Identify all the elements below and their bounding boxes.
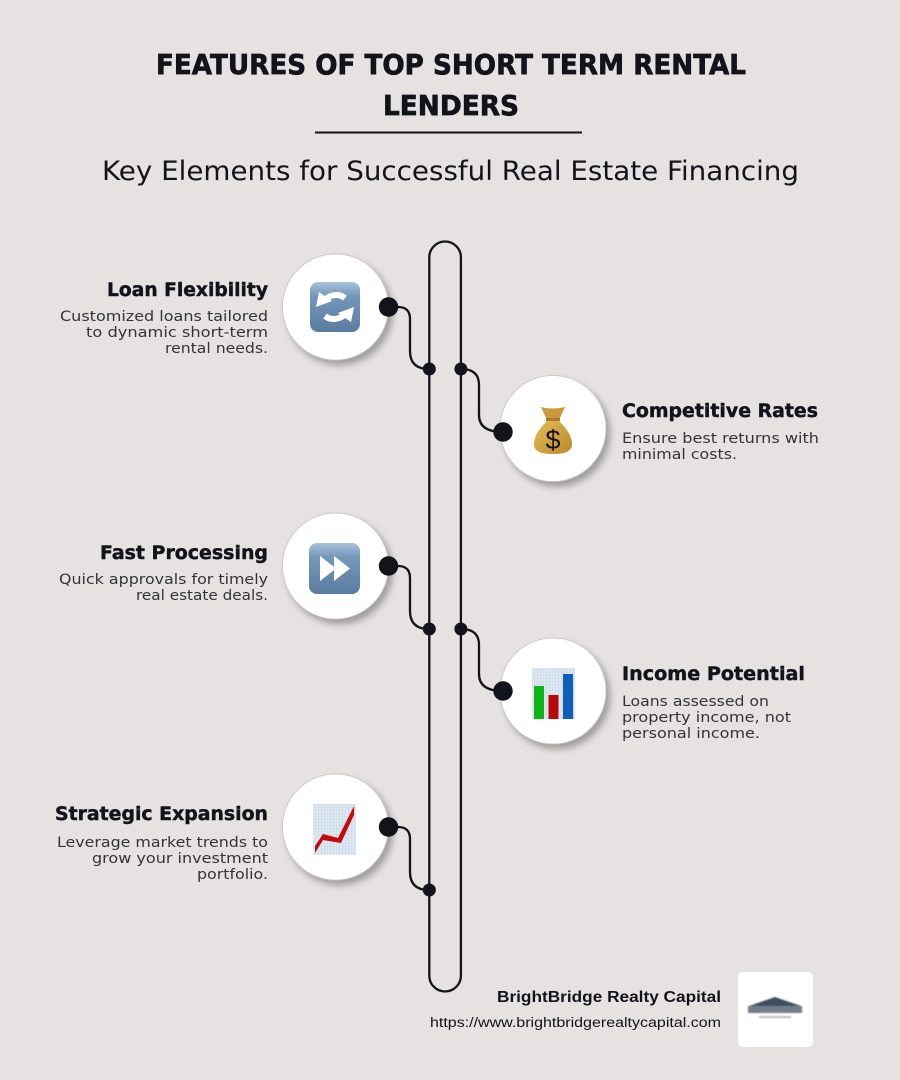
- footer brand: BrightBridge Realty Capital: [497, 989, 721, 1006]
- item: Strategic Expansion: [55, 774, 436, 896]
- icon: arrows cycle: [310, 282, 360, 332]
- fast processing text: Fast Processing: [100, 542, 268, 564]
- connector: [454, 362, 513, 442]
- competitive rates text: [622, 400, 819, 463]
- title: LENDERS: [383, 89, 519, 122]
- loan flexibility text: rental needs.: [165, 341, 268, 357]
- fast processing circle: [282, 513, 388, 619]
- loan flexibility text: Customized loans tailored: [60, 309, 268, 325]
- connector: [379, 297, 436, 376]
- loan flexibility text: [60, 279, 269, 357]
- competitive rates circle: [500, 376, 606, 482]
- subtitle: Key Elements for Successful Real Estate Financing: [102, 156, 799, 187]
- icon: bar chart: [532, 668, 575, 719]
- competitive rates text: Competitive Rates: [622, 400, 818, 422]
- item: Fast Processing: [59, 513, 436, 636]
- strategic expansion text: Strategic Expansion: [55, 803, 268, 825]
- income potential text: personal income.: [622, 726, 760, 742]
- strategic expansion text: Leverage market trends to: [57, 835, 268, 851]
- connector: [454, 622, 513, 701]
- strategic expansion text: portfolio.: [197, 867, 268, 883]
- strategic expansion text: grow your investment: [92, 851, 268, 867]
- competitive rates text: Ensure best returns with: [622, 431, 819, 447]
- title: FEATURES OF TOP SHORT TERM RENTAL: [156, 48, 746, 81]
- income potential text: property income, not: [622, 710, 791, 726]
- icon: rising line chart: [313, 804, 356, 855]
- item: Income Potential: [454, 622, 805, 744]
- loan flexibility text: to dynamic short-term: [86, 325, 268, 341]
- income potential text: [622, 663, 805, 742]
- loan flexibility circle: [282, 254, 388, 360]
- item: Loan Flexibility: [60, 254, 436, 376]
- income potential circle: [500, 638, 606, 744]
- footer brand: https://www.brightbridgerealtycapital.com: [430, 1015, 721, 1030]
- income potential text: Loans assessed on: [622, 694, 769, 710]
- title: [156, 48, 746, 134]
- fast processing text: Quick approvals for timely: [59, 572, 268, 588]
- strategic expansion circle: [282, 774, 388, 880]
- connector: [379, 817, 436, 896]
- footer brand: [430, 989, 721, 1030]
- icon: fast forward: [309, 543, 360, 594]
- connector: [379, 556, 436, 636]
- logo: [738, 972, 813, 1047]
- fast processing text: [59, 542, 268, 604]
- income potential text: Income Potential: [622, 663, 805, 685]
- loan flexibility text: Loan Flexibility: [107, 279, 269, 301]
- item: Competitive Rates: [454, 362, 819, 482]
- icon: money bag: $: [545, 425, 561, 455]
- competitive rates text: minimal costs.: [622, 447, 737, 463]
- icon: money bag: [534, 407, 572, 455]
- timeline pipe: [429, 242, 461, 992]
- strategic expansion text: [55, 803, 268, 883]
- fast processing text: real estate deals.: [136, 588, 268, 604]
